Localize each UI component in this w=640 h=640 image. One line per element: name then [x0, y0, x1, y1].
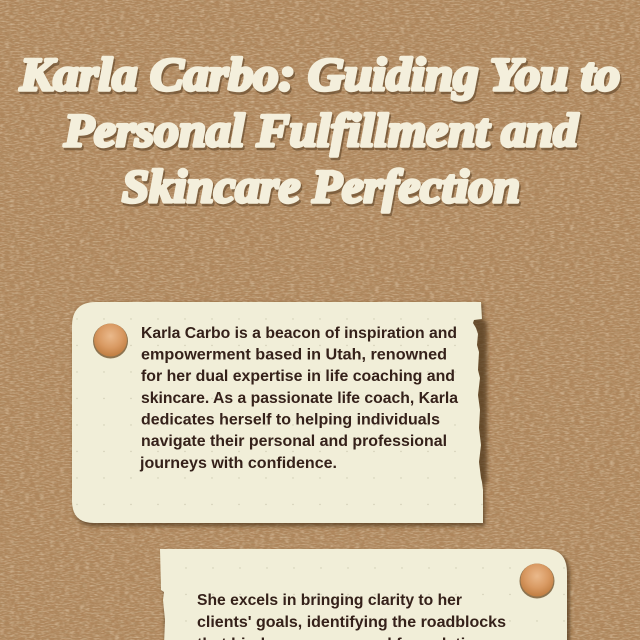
second paragraph: She excels in bringing clarity to her — [197, 592, 462, 609]
panel: second note — [160, 549, 570, 640]
panel: intro note — [72, 302, 487, 526]
second paragraph — [197, 592, 506, 640]
title: Personal Fulfillment and — [64, 108, 581, 160]
intro paragraph: empowerment based in Utah, renowned — [141, 346, 447, 364]
intro paragraph: Karla Carbo is a beacon of inspiration and — [141, 325, 457, 342]
title: Karla Carbo: Guiding You to — [20, 52, 622, 104]
second paragraph: clients' goals, identifying the roadblocks — [197, 614, 506, 631]
icon: copper pin — [520, 564, 554, 598]
title: Personal Fulfillment and — [63, 105, 580, 157]
intro paragraph — [139, 325, 458, 472]
title — [19, 49, 622, 216]
title: Skincare Perfection — [122, 161, 520, 213]
intro paragraph: journeys with confidence. — [139, 455, 337, 472]
intro paragraph: for her dual expertise in life coaching and — [141, 368, 455, 385]
icon: copper pin — [93, 324, 128, 358]
title: Karla Carbo: Guiding You to — [19, 49, 620, 101]
intro paragraph: skincare. As a passionate life coach, Karla — [141, 390, 458, 407]
intro paragraph: navigate their personal and professional — [141, 433, 447, 450]
intro paragraph: dedicates herself to helping individuals — [141, 412, 440, 428]
title: Skincare Perfection — [124, 164, 522, 216]
